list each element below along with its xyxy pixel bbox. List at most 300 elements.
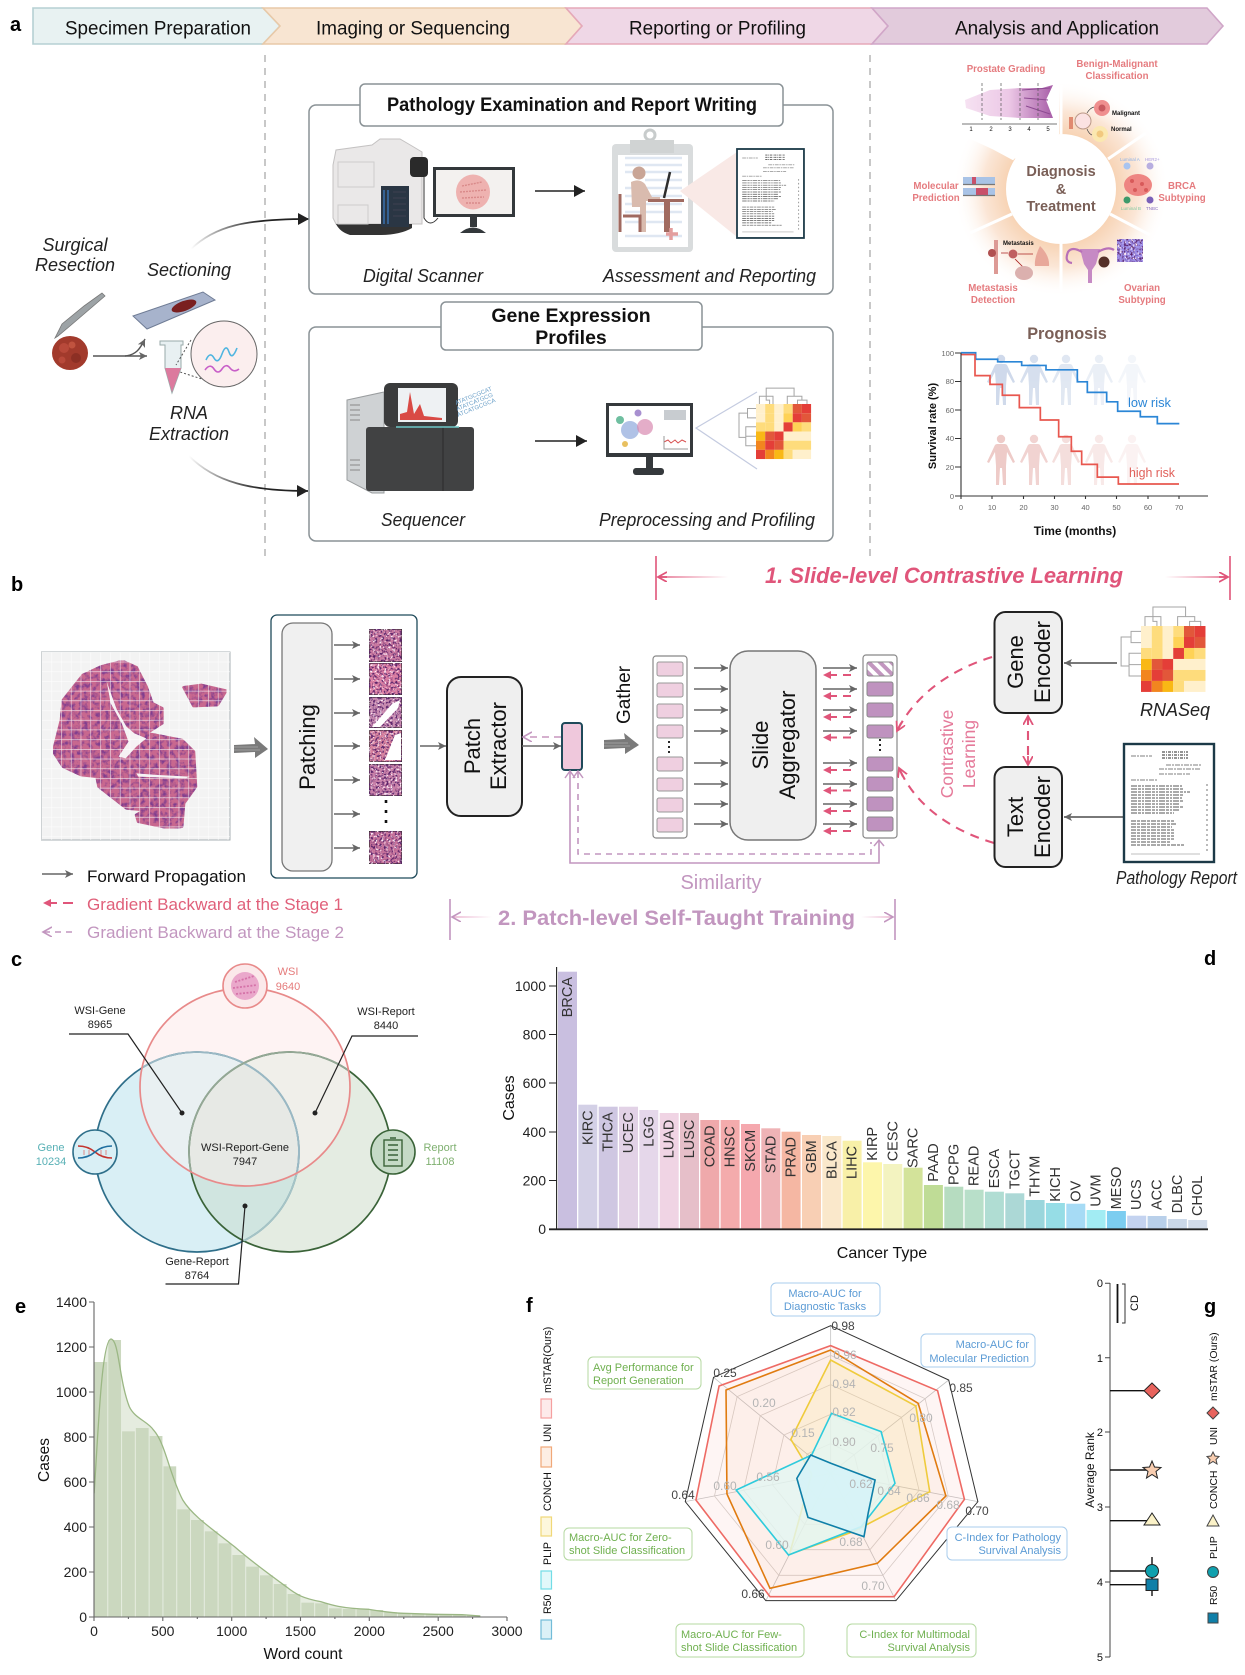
icon: metastasis — [988, 240, 1049, 280]
label: Report: Report — [423, 1142, 457, 1154]
label: Metastasis Detection: Detection — [971, 295, 1015, 306]
radar scale labels: 0.64 — [877, 1484, 901, 1498]
legend: stage 1: Gradient Backward at the Stage 1 — [87, 895, 343, 914]
radar scale labels: 0.25 — [713, 1366, 737, 1380]
label: Surgical Resection: Resection — [35, 255, 115, 275]
panel: Gene Expression Profiles — [309, 302, 833, 541]
radar scale labels: 0.68 — [936, 1498, 960, 1512]
label: Benign-Malignant Classification: Benign-Malignant — [1076, 59, 1158, 70]
density curve — [94, 1339, 480, 1616]
radar scale labels: 0.66 — [741, 1587, 765, 1601]
bar labels: LGG — [641, 1116, 657, 1147]
legend: R50: R50 — [1208, 1586, 1220, 1605]
label: BRCA Subtyping: Subtyping — [1158, 193, 1206, 204]
callout: Zero-shot — [564, 1528, 692, 1560]
icon: prostate grading strip: 1 — [969, 127, 973, 133]
legend: CONCH — [1207, 1470, 1220, 1526]
callout: Zero-shot: shot Slide Classification — [569, 1545, 685, 1557]
arrows: contrastive curves — [897, 657, 1028, 843]
text: sequence reads — [455, 386, 497, 419]
x tick labels: 1500 — [285, 1623, 316, 1639]
icon: prostate grading strip: 5 — [1046, 127, 1050, 133]
label: Report: 11108 — [426, 1156, 454, 1168]
image: whole slide with grid — [42, 652, 230, 840]
bar labels: KICH — [1048, 1167, 1064, 1202]
label: Similarity: Similarity — [680, 872, 762, 894]
icon: BRCA subtyping: HER2+ — [1145, 157, 1160, 162]
text: sequence reads: ATATGCGCAT — [455, 386, 493, 407]
callout: Diagnostic Tasks — [771, 1283, 880, 1316]
chart: survival curves — [927, 349, 1208, 538]
y tick labels: 1200 — [56, 1339, 87, 1355]
heading: gene expression box: Gene Expression — [491, 305, 651, 327]
callout: Diagnostic Tasks: Macro-AUC for — [788, 1288, 862, 1300]
callout: Report Generation: Avg Performance for — [593, 1362, 694, 1374]
heading: Prognosis: Prognosis — [1027, 325, 1107, 343]
bar labels: LIHC — [845, 1146, 861, 1179]
legend: rank models — [1207, 1332, 1220, 1623]
radar scale labels: 0.85 — [949, 1381, 973, 1395]
radar scale labels: 0.60 — [765, 1538, 789, 1552]
panel letter e: e — [15, 1296, 26, 1318]
tick labels: 20 — [946, 463, 954, 472]
legend: PLIP — [1208, 1536, 1220, 1578]
series: PLIP — [736, 1413, 895, 1555]
block: Text Encoder: Text — [1003, 797, 1028, 837]
legend: R50 — [1208, 1586, 1220, 1623]
block: Gene Encoder: Gene — [1003, 635, 1028, 689]
y tick labels: 600 — [523, 1075, 546, 1091]
y axis title: Cases — [501, 1075, 518, 1121]
callout fan lines — [696, 392, 757, 469]
radar scale labels: 0.96 — [833, 1348, 857, 1362]
icon: BRCA subtyping: TNBC — [1146, 206, 1159, 211]
tick labels: 70 — [1175, 503, 1183, 512]
tick labels: 10 — [988, 503, 996, 512]
radar scale labels: 0.56 — [756, 1470, 780, 1484]
density area — [94, 1339, 480, 1617]
bar labels: COAD — [702, 1125, 718, 1167]
chart: average rank — [1083, 1278, 1161, 1664]
radar scale labels: 0.64 — [671, 1488, 695, 1502]
legend: UNI — [541, 1424, 554, 1467]
radar scale labels: 0.60 — [713, 1479, 737, 1493]
tick labels: 0 — [1097, 1278, 1103, 1290]
stage: Specimen Preparation: Specimen Preparation — [65, 18, 251, 40]
lollipop: PLIP and R50 — [1110, 1557, 1158, 1596]
bar labels — [560, 977, 1206, 1216]
icon: digital scanner — [333, 139, 438, 235]
bar labels: READ — [967, 1146, 983, 1186]
block: Gene Encoder: Encoder — [1030, 621, 1055, 703]
block: Slide Aggregator: Aggregator — [775, 691, 800, 799]
centre label: Diagnosis — [1026, 164, 1096, 180]
bar labels: MESO — [1109, 1167, 1125, 1209]
bar labels: LUAD — [662, 1120, 678, 1158]
icon: benign malignant cells — [1069, 100, 1140, 142]
y tick labels: 1000 — [56, 1384, 87, 1400]
arrow: stage 2 gradient to extractor — [523, 736, 561, 738]
bar labels: ACC — [1150, 1179, 1166, 1210]
legend: PLIP: PLIP — [1208, 1536, 1220, 1559]
y axis title: Survival rate (%) — [927, 383, 939, 469]
legend: PLIP: PLIP — [542, 1542, 554, 1565]
arrow: tissue to slide — [125, 339, 145, 356]
tick labels — [941, 349, 1183, 512]
legend: propagation — [42, 867, 344, 942]
bar labels: SKCM — [743, 1130, 759, 1172]
workflow header chevrons — [33, 8, 1223, 44]
panel letter b: b — [11, 574, 23, 596]
legend: UNI — [1207, 1427, 1220, 1464]
bar labels: CESC — [885, 1121, 901, 1161]
bar labels: PAAD — [926, 1143, 942, 1182]
bar labels: THYM — [1028, 1156, 1044, 1197]
label: Preprocessing and Profiling: Preprocessing and Profiling — [599, 510, 815, 530]
x axis title: Time (months) — [1034, 524, 1116, 538]
panel: Pathology Examination and Report Writing — [309, 84, 833, 294]
block: Slide Aggregator: Slide — [748, 721, 773, 769]
label: Gene: Gene — [38, 1142, 64, 1154]
icon: profiling monitor — [606, 403, 693, 475]
callout: WSI-Gene: WSI-Gene — [74, 1005, 126, 1017]
y tick labels: 200 — [523, 1172, 546, 1188]
axis title: Average Rank — [1083, 1431, 1097, 1508]
legend: CONCH: CONCH — [1208, 1470, 1220, 1509]
stage: Imaging or Sequencing: Imaging or Sequencing — [316, 18, 510, 40]
y tick labels: 400 — [523, 1124, 546, 1140]
bar labels: KIRC — [580, 1110, 596, 1145]
block: Patch Extractor — [447, 677, 522, 816]
stage: Analysis and Application — [872, 8, 1223, 44]
axes — [549, 967, 557, 1229]
icon: prostate grading strip: 2 — [989, 127, 993, 133]
bar labels: LUSC — [682, 1120, 698, 1158]
icon: benign malignant cells: Normal — [1111, 127, 1132, 133]
y tick labels: 600 — [64, 1474, 87, 1490]
tick labels: 80 — [946, 377, 954, 386]
label: low risk: low risk — [1128, 395, 1171, 410]
label: Surgical Resection: Surgical — [42, 235, 109, 255]
callout: Diagnostic Tasks: Diagnostic Tasks — [784, 1301, 867, 1313]
histogram bars — [94, 1340, 480, 1617]
radar scale labels: 0.94 — [832, 1377, 856, 1391]
arrows: aggregator to outputs — [823, 668, 857, 824]
radar grid — [685, 1326, 978, 1601]
legend: UNI: UNI — [1208, 1427, 1220, 1445]
icon: ovarian — [1067, 239, 1143, 283]
bar labels: THCA — [601, 1112, 617, 1152]
patch tiles — [369, 629, 402, 864]
callout cone — [680, 152, 737, 237]
panel letter d: d — [1204, 948, 1216, 970]
stage: Reporting or Profiling: Reporting or Profiling — [629, 18, 806, 40]
curve: low risk — [961, 353, 1179, 424]
arrows: features to aggregator — [694, 668, 728, 824]
tick labels: 40 — [1081, 503, 1090, 512]
y tick labels: 400 — [64, 1519, 87, 1535]
centre label: & — [1056, 182, 1067, 198]
icon: pathology report document — [737, 149, 804, 238]
stage: Reporting or Profiling — [566, 8, 888, 44]
icon: sequencer — [347, 383, 474, 493]
icon: prostate grading strip — [962, 83, 1057, 133]
x tick labels: 2000 — [354, 1623, 385, 1639]
radar scale labels: 0.70 — [965, 1504, 989, 1518]
y tick labels: 0 — [79, 1609, 87, 1625]
heading: Patch-level Self-Taught Training — [450, 899, 895, 940]
icon: BRCA subtyping — [1120, 157, 1160, 211]
bar labels: PCPG — [946, 1144, 962, 1185]
callout: Pathology survival: Survival Analysis — [978, 1545, 1061, 1557]
icon: benign malignant cells: Malignant — [1112, 111, 1140, 117]
radar scale labels: 0.66 — [906, 1491, 930, 1505]
CD bracket: CD — [1129, 1295, 1141, 1311]
x tick labels: 500 — [151, 1623, 175, 1639]
bar labels: BRCA — [560, 977, 576, 1017]
chart: Venn diagram — [36, 964, 457, 1284]
bar labels: HNSC — [723, 1126, 739, 1167]
heading: pathology box — [360, 84, 783, 126]
block: Slide Aggregator — [730, 651, 816, 840]
heading: gene expression box: Profiles — [535, 327, 607, 349]
bar labels: STAD — [763, 1136, 779, 1173]
label: WSI-Report-Gene: 7947 — [233, 1156, 257, 1168]
radar scale labels: 0.92 — [832, 1405, 856, 1419]
series: UNI — [726, 1350, 946, 1588]
stage: Imaging or Sequencing — [263, 8, 582, 44]
chart: cancer type bars — [501, 967, 1208, 1262]
tick labels: 0 — [959, 503, 963, 512]
label: WSI: 9640 — [276, 981, 300, 993]
bar labels: UVM — [1089, 1174, 1105, 1207]
legend: CONCH — [541, 1472, 554, 1536]
icon: prostate grading strip: 3 — [1008, 127, 1012, 133]
block: Patching — [282, 623, 332, 871]
label: WSI-Report-Gene: WSI-Report-Gene — [201, 1142, 289, 1154]
heading: Patch-level Self-Taught Training: 2. Patch-level Self-Taught Training — [498, 907, 855, 930]
icon: monitor with slide — [433, 167, 515, 233]
icon: expression heatmap — [739, 388, 811, 459]
legend: stage 2: Gradient Backward at the Stage 2 — [87, 923, 344, 942]
radar scale labels: 0.75 — [870, 1441, 894, 1455]
legend: mSTAR: mSTAR(Ours) — [542, 1327, 554, 1393]
icon row: high risk figures — [987, 435, 1146, 485]
block: Patching: Patching — [295, 704, 320, 790]
icon: metastasis: Metastasis — [1003, 241, 1034, 247]
bar labels: KIRP — [865, 1127, 881, 1161]
icon: BRCA subtyping: Luminal A — [1120, 157, 1140, 162]
y tick labels: 200 — [64, 1564, 87, 1580]
arrow: thick gather — [604, 733, 639, 754]
tick labels: 50 — [1112, 503, 1121, 512]
bar labels: ESCA — [987, 1148, 1003, 1188]
radar scale labels: 0.15 — [791, 1426, 815, 1440]
callout: Molecular Prediction: Molecular Prediction — [929, 1353, 1029, 1365]
bar labels: UCS — [1129, 1179, 1145, 1210]
series: R50 — [797, 1455, 875, 1537]
callout: Zero-shot: Macro-AUC for Zero- — [569, 1532, 672, 1544]
panel: Diagnosis and Treatment wheel — [912, 59, 1206, 306]
centre label: Treatment — [1026, 199, 1096, 215]
stage: Analysis and Application: Analysis and Application — [955, 18, 1159, 40]
bar labels: OV — [1068, 1180, 1084, 1202]
label: Digital Scanner: Digital Scanner — [363, 266, 484, 286]
tick labels: 60 — [946, 406, 954, 415]
text: sequence reads: ATATCATGCG — [456, 392, 494, 413]
callout: Pathology survival — [947, 1527, 1067, 1560]
radar scale labels — [671, 1319, 989, 1601]
label: RNA Extraction: RNA — [170, 403, 208, 423]
icon: tissue slide — [133, 292, 215, 329]
label: Molecular Prediction: Prediction — [912, 193, 960, 204]
legend: R50: R50 — [542, 1594, 554, 1614]
icon: DNA — [73, 1130, 117, 1174]
heading: Slide-level Contrastive Learning: 1. Slide-level Contrastive Learning — [765, 563, 1124, 588]
tick labels: 20 — [1019, 503, 1028, 512]
arrow: tissue to tube — [93, 355, 147, 357]
block: Patch Extractor: Extractor — [486, 702, 511, 790]
chart: radar — [564, 1283, 1067, 1657]
icon: WSI — [223, 964, 267, 1008]
bar labels: TGCT — [1007, 1150, 1023, 1189]
text: sequence reads: ATCATGCGCA — [457, 398, 497, 419]
axis — [1105, 1283, 1110, 1657]
tick labels — [1097, 1278, 1103, 1664]
radar scale labels: 0.68 — [839, 1535, 863, 1549]
tick labels: 40 — [946, 434, 954, 443]
lollipop: mSTAR — [1110, 1383, 1160, 1398]
legend: PLIP — [541, 1542, 554, 1589]
arrow: sequencer to profiling — [535, 440, 587, 442]
label: Gene: 10234 — [36, 1156, 66, 1168]
lollipop: UNI — [1110, 1461, 1161, 1478]
callout: Gene-Report — [165, 1204, 248, 1284]
panel: patching — [271, 615, 417, 878]
x axis title: Cancer Type — [837, 1245, 927, 1262]
CD bracket — [1118, 1284, 1141, 1323]
tick labels: 60 — [1144, 503, 1152, 512]
label: Benign-Malignant Classification: Classification — [1086, 71, 1149, 82]
radar scale labels: 0.90 — [832, 1435, 856, 1449]
tick labels: 2 — [1097, 1427, 1103, 1439]
callout: Multimodal: C-Index for Multimodal — [859, 1629, 970, 1641]
label: Contrastive Learning — [937, 710, 979, 798]
y axis title: Cases — [36, 1438, 53, 1482]
x tick labels: 1000 — [216, 1623, 247, 1639]
callout: WSI-Gene: 8965 — [88, 1019, 112, 1031]
x tick labels: 0 — [90, 1623, 98, 1639]
stack: patch features — [653, 656, 687, 838]
panel letter f: f — [526, 1295, 533, 1317]
legend: mSTAR — [541, 1327, 554, 1418]
callout: Gene-Report: 8764 — [185, 1270, 209, 1282]
radar scale labels: 0.98 — [831, 1319, 855, 1333]
block: Text Encoder: Encoder — [1030, 776, 1055, 858]
stack: slide tokens — [863, 655, 897, 838]
label: Contrastive Learning: Contrastive — [937, 710, 957, 798]
callout: Molecular Prediction: Macro-AUC for — [956, 1339, 1029, 1351]
tick labels: 0 — [950, 492, 954, 501]
callout: Multimodal — [847, 1624, 976, 1657]
arrow: to pathology box — [191, 219, 309, 249]
label: Metastasis Detection: Metastasis — [968, 283, 1018, 294]
legend: R50 — [541, 1594, 554, 1639]
arrow: report to text encoder — [1064, 816, 1123, 818]
tissue tears — [107, 682, 190, 778]
x tick labels: 3000 — [491, 1623, 523, 1639]
icon: RNAseq heatmap — [1121, 607, 1205, 692]
label: Molecular Prediction: Molecular — [913, 181, 959, 192]
arrow: scanner to assessment — [535, 190, 585, 192]
bar labels: BLCA — [824, 1141, 840, 1179]
radar scale labels: 0.62 — [849, 1477, 873, 1491]
x axis title: Word count — [264, 1646, 343, 1663]
curve: high risk — [961, 355, 1179, 484]
label: Sectioning: Sectioning — [147, 260, 231, 280]
block: Patch Extractor: Patch — [460, 718, 485, 774]
icon: RNA tube — [160, 341, 183, 393]
icon: clipboard and pathologist — [612, 130, 693, 252]
white tears in patches — [372, 700, 401, 760]
callout: Few-shot: shot Slide Classification — [681, 1642, 797, 1654]
callout: WSI-Gene — [69, 1005, 184, 1116]
label: RNASeq: RNASeq — [1140, 700, 1210, 720]
bar labels: CHOL — [1190, 1176, 1206, 1216]
lollipop: CONCH — [1110, 1513, 1160, 1525]
legend: forward: Forward Propagation — [87, 867, 246, 886]
bar labels: DLBC — [1170, 1175, 1186, 1213]
label: Ovarian Subtyping: Ovarian — [1124, 283, 1160, 294]
series: mSTAR — [696, 1346, 964, 1597]
y tick labels: 1400 — [56, 1294, 87, 1310]
icon: molecular prediction — [963, 177, 995, 196]
panel letter a: a — [10, 14, 22, 36]
callout: Gene-Report: Gene-Report — [165, 1256, 229, 1268]
block: Gene Encoder — [994, 612, 1062, 713]
y tick labels: 800 — [64, 1429, 87, 1445]
label: WSI: WSI — [278, 966, 298, 978]
tick labels: 3 — [1097, 1502, 1103, 1514]
callout: Pathology survival: C-Index for Pathology — [955, 1532, 1062, 1544]
block: Text Encoder — [994, 767, 1062, 867]
icon: report — [371, 1130, 415, 1174]
label: Contrastive Learning: Learning — [959, 720, 979, 788]
label: RNA Extraction: Extraction — [149, 424, 229, 444]
icon: RNA lens — [176, 321, 257, 387]
bar labels: UCEC — [621, 1112, 637, 1153]
radar scale labels: 0.20 — [752, 1396, 776, 1410]
panel letter c: c — [11, 949, 22, 971]
arrow: RNAseq to gene encoder — [1064, 662, 1117, 664]
stage: Specimen Preparation — [33, 8, 280, 44]
icon: prostate grading strip: 4 — [1027, 127, 1031, 133]
arrows: stage 1 gradients — [823, 675, 851, 831]
callout: Few-shot: Macro-AUC for Few- — [681, 1629, 782, 1641]
legend: CONCH: CONCH — [542, 1472, 554, 1511]
arrow: extractor to embedding — [522, 745, 561, 747]
callout: Molecular Prediction — [921, 1334, 1035, 1367]
label: Assessment and Reporting: Assessment and Reporting — [602, 266, 816, 286]
y tick labels: 1000 — [515, 978, 546, 994]
arrow: patches to extractor — [420, 745, 446, 747]
chart: word count histogram — [36, 1294, 523, 1663]
tick labels: 100 — [941, 349, 954, 358]
bars — [558, 972, 1207, 1229]
tick labels: 1 — [1097, 1353, 1103, 1365]
callout: Report Generation — [588, 1357, 701, 1389]
label: Prostate Grading: Prostate Grading — [967, 64, 1045, 75]
